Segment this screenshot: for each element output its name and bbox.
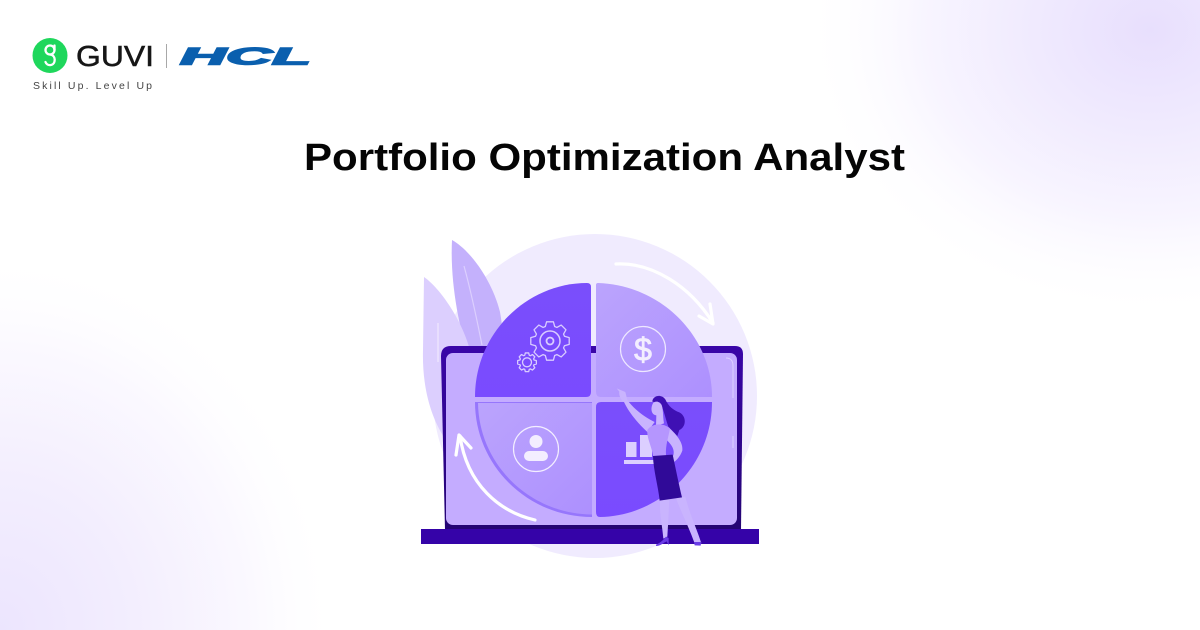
icon: bar chart [624,435,656,464]
laptop screen [446,353,737,525]
logo: GUVI HCL [32,38,311,92]
pie: bottom-left quadrant [475,402,592,517]
pie: top-right quadrant [596,283,712,397]
wordmark: GUVI: GUVI [76,41,154,73]
front leg [660,499,669,539]
raised arm [617,388,655,432]
icon: gears [518,322,569,372]
leaf: front [423,277,472,440]
icon: person [514,426,558,472]
illustration: portfolio pie on laptop [421,234,759,558]
divider [166,44,167,68]
icon: dollar: $ [634,332,652,368]
icon: dollar [620,326,666,372]
laptop base [421,529,759,544]
background circle [433,234,757,558]
head and neck [651,402,664,426]
figure: woman pointing [617,388,701,546]
title: Portfolio Optimization Analyst [304,137,905,179]
tagline: Skill Up. Level Up [33,80,152,92]
bent arm [665,428,682,464]
icon: GUVI green circle [32,38,68,73]
hair [652,396,685,436]
arrow: top right [616,264,713,324]
torso [647,424,670,457]
large gear [531,322,569,360]
shoes [656,537,669,546]
small gear [518,353,536,372]
wordmark: HCL: HCL [180,44,311,70]
pie: top-left quadrant [475,283,591,397]
laptop frame [441,346,743,530]
back leg [676,497,701,543]
pie: bottom-right quadrant [596,402,712,517]
skirt [653,455,682,501]
leaf: back [452,240,503,362]
arrow: bottom left [456,435,535,520]
